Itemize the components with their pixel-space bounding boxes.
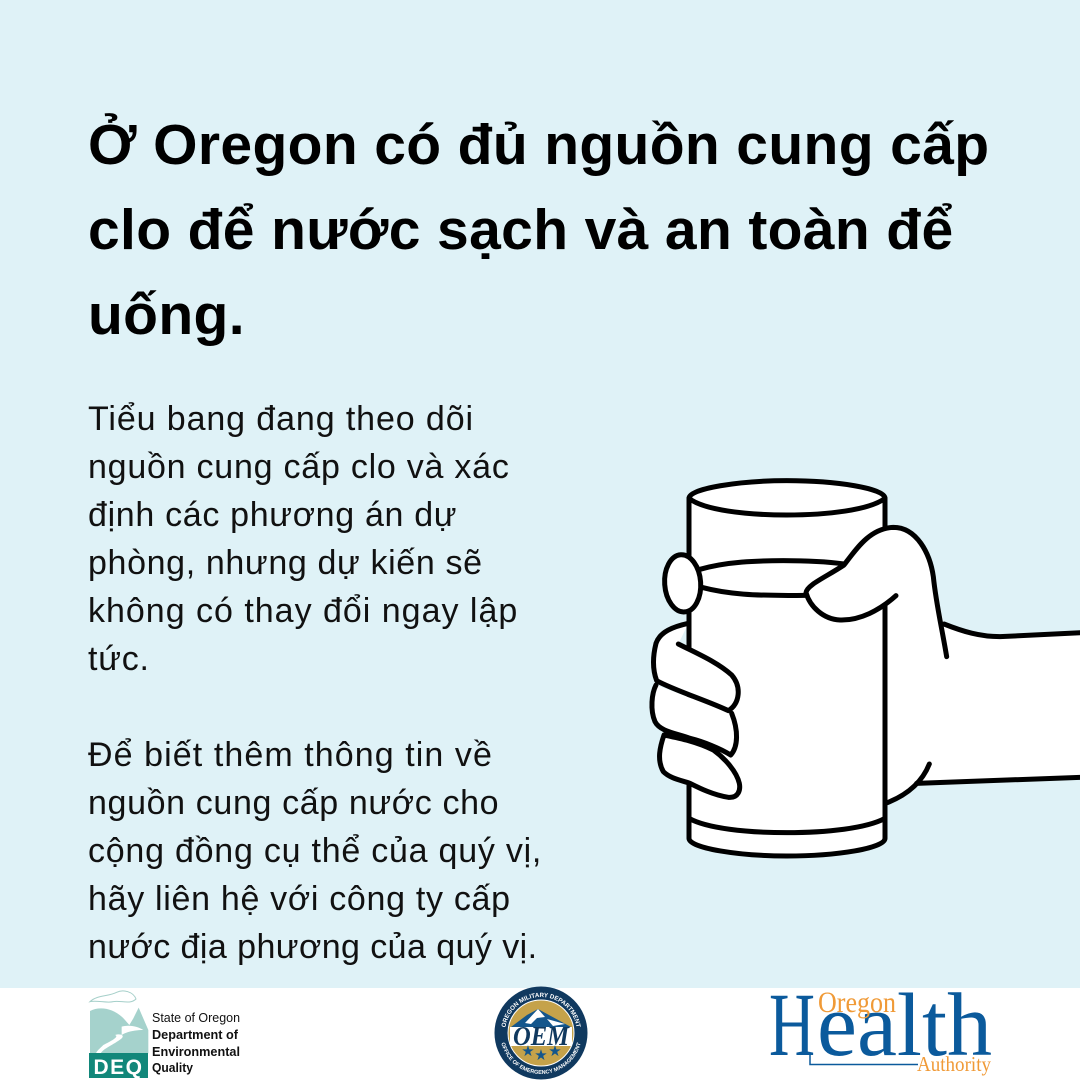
text block: contact: nước địa phương của quý vị. <box>88 928 538 966</box>
text block: monitoring: phòng, nhưng dự kiến sẽ <box>88 544 483 582</box>
arm and back of hand <box>885 529 1080 803</box>
landscape <box>90 991 148 1053</box>
little finger <box>660 735 740 797</box>
logo: Oregon Office of Emergency Management seal: OREGON MILITARY DEPARTMENT <box>502 992 581 1027</box>
agency name: Environmental <box>152 1044 240 1059</box>
text block: monitoring <box>88 400 518 678</box>
text block: monitoring: Tiểu bang đang theo dõi <box>88 400 474 438</box>
fingertip on the far side <box>663 553 703 613</box>
title: clo để nước sạch và an toàn để <box>88 198 954 262</box>
ring finger <box>652 685 737 755</box>
text block: contact: cộng đồng cụ thể của quý vị, <box>88 832 542 870</box>
thumb <box>806 527 947 657</box>
agency name <box>152 1010 240 1075</box>
logo: Oregon Health Authority: Oregon <box>818 986 896 1019</box>
logo: Oregon Office of Emergency Management seal: OEM <box>513 1021 570 1051</box>
icon: hand holding glass of water <box>649 478 1080 858</box>
logo: Oregon Office of Emergency Management seal: ★ <box>548 1042 562 1060</box>
title: Ở Oregon có đủ nguồn cung cấp <box>88 113 989 177</box>
text block: monitoring: nguồn cung cấp clo và xác <box>88 448 510 486</box>
logo: Oregon Health Authority: Authority <box>917 1052 991 1076</box>
glass <box>689 481 885 856</box>
logo: Oregon Office of Emergency Management seal: OFFICE OF EMERGENCY MANAGEMENT <box>502 1042 580 1074</box>
title: uống. <box>88 283 245 347</box>
logo: Oregon Office of Emergency Management seal: ★ <box>534 1046 548 1064</box>
agency name: State of Oregon <box>152 1010 240 1025</box>
text block: monitoring: tức. <box>88 640 150 678</box>
water line <box>700 561 844 595</box>
text block: monitoring: định các phương án dự <box>88 496 457 534</box>
middle finger <box>654 623 738 711</box>
text block: contact: Để biết thêm thông tin về <box>88 736 493 774</box>
text block: contact <box>88 736 542 966</box>
logo: Oregon Office of Emergency Management seal <box>494 986 588 1080</box>
agency name: Department of <box>152 1027 239 1042</box>
agency name: Quality <box>152 1060 194 1075</box>
text block: contact: hãy liên hệ với công ty cấp <box>88 880 511 918</box>
logo: Oregon DEQ <box>88 990 240 1079</box>
text block: monitoring: không có thay đổi ngay lập <box>88 592 518 630</box>
DEQ badge: DEQ <box>93 1056 144 1079</box>
text block: contact: nguồn cung cấp nước cho <box>88 784 499 822</box>
title <box>88 113 989 347</box>
logo: Oregon Office of Emergency Management seal: ★ <box>521 1042 535 1060</box>
footer band <box>0 988 1080 1080</box>
